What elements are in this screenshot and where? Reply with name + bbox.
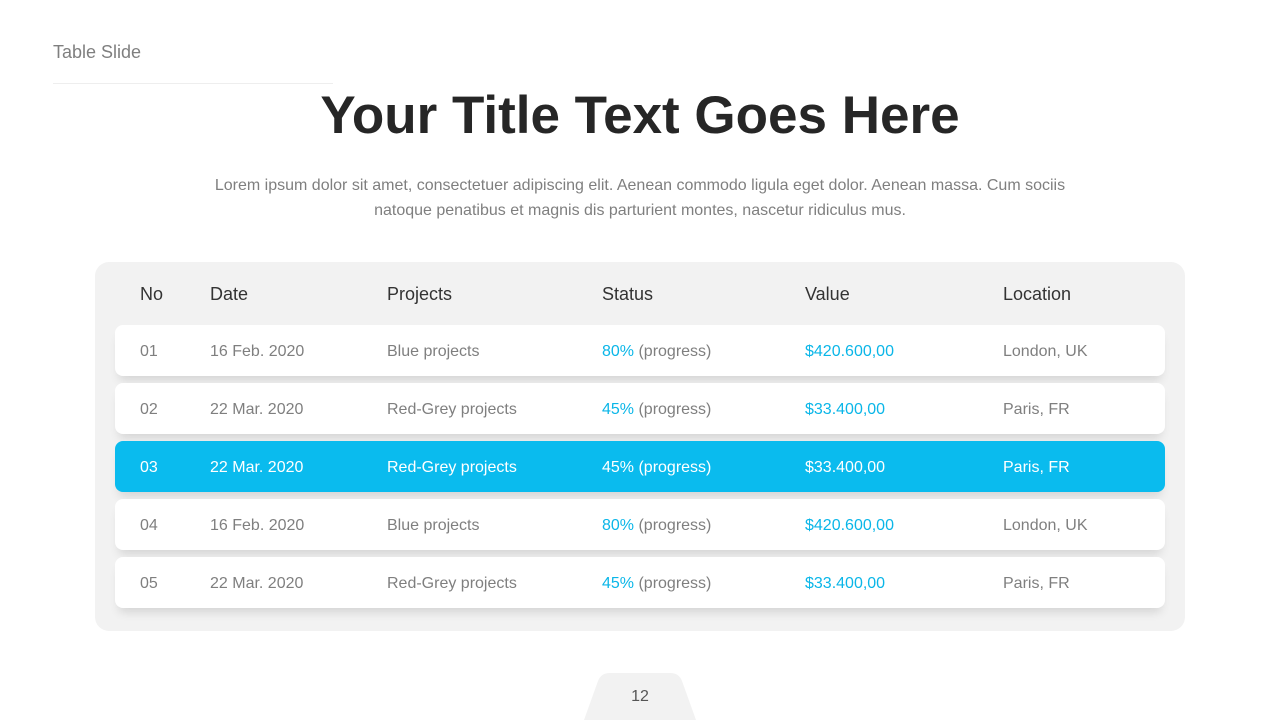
panel: table	[95, 262, 1185, 631]
label: Table Slide: Table Slide	[53, 42, 141, 62]
table header: Location	[1003, 284, 1071, 304]
row 03 highlighted: 03	[140, 459, 158, 476]
row 03 highlighted: $33.400,00	[805, 459, 885, 476]
row 03 highlighted: Red-Grey projects	[387, 459, 517, 476]
row 02: Red-Grey projects	[387, 401, 517, 418]
row 05	[115, 557, 1165, 608]
table header: Value	[805, 284, 850, 304]
row 03 highlighted: Paris, FR	[1003, 459, 1070, 476]
row 02: Paris, FR	[1003, 401, 1070, 418]
table header	[140, 284, 1071, 304]
row 04: $420.600,00	[805, 517, 894, 534]
page number tab	[584, 673, 696, 720]
table header: No	[140, 284, 163, 304]
row 05: 22 Mar. 2020	[210, 575, 303, 592]
row 01: Blue projects	[387, 343, 480, 360]
row 02: $33.400,00	[805, 401, 885, 418]
row 04: 04	[140, 517, 158, 534]
row 04: London, UK	[1003, 517, 1088, 534]
row 02: 02	[140, 401, 158, 418]
page number tab: 12	[631, 688, 649, 705]
row 01: $420.600,00	[805, 343, 894, 360]
row 05: Red-Grey projects	[387, 575, 517, 592]
row 02: 45% (progress)	[602, 401, 711, 418]
row 05: $33.400,00	[805, 575, 885, 592]
row 02: 22 Mar. 2020	[210, 401, 303, 418]
row 01: 16 Feb. 2020	[210, 343, 304, 360]
row 05: 45% (progress)	[602, 575, 711, 592]
row 04	[115, 499, 1165, 550]
row 01	[115, 325, 1165, 376]
row 03 highlighted: 45% (progress)	[602, 459, 711, 476]
row 05: Paris, FR	[1003, 575, 1070, 592]
row 03 highlighted: 22 Mar. 2020	[210, 459, 303, 476]
row 01: 01	[140, 343, 158, 360]
row 04: 80% (progress)	[602, 517, 711, 534]
row 01: 80% (progress)	[602, 343, 711, 360]
row 03 highlighted	[115, 441, 1165, 492]
row 05: 05	[140, 575, 158, 592]
title: Your Title Text Goes Here	[320, 86, 960, 145]
row 01: London, UK	[1003, 343, 1088, 360]
row 04: 16 Feb. 2020	[210, 517, 304, 534]
table header: Date	[210, 284, 248, 304]
subtitle text: Lorem ipsum dolor sit amet, consectetuer adipiscing elit. Aenean commodo ligula eget dolor. Aenean massa. Cum sociis natoque penatibus et magnis dis parturient montes, nascetur ridiculus mus.	[215, 177, 1065, 219]
row 04: Blue projects	[387, 517, 480, 534]
table header: Status	[602, 284, 653, 304]
row 02	[115, 383, 1165, 434]
table header: Projects	[387, 284, 452, 304]
